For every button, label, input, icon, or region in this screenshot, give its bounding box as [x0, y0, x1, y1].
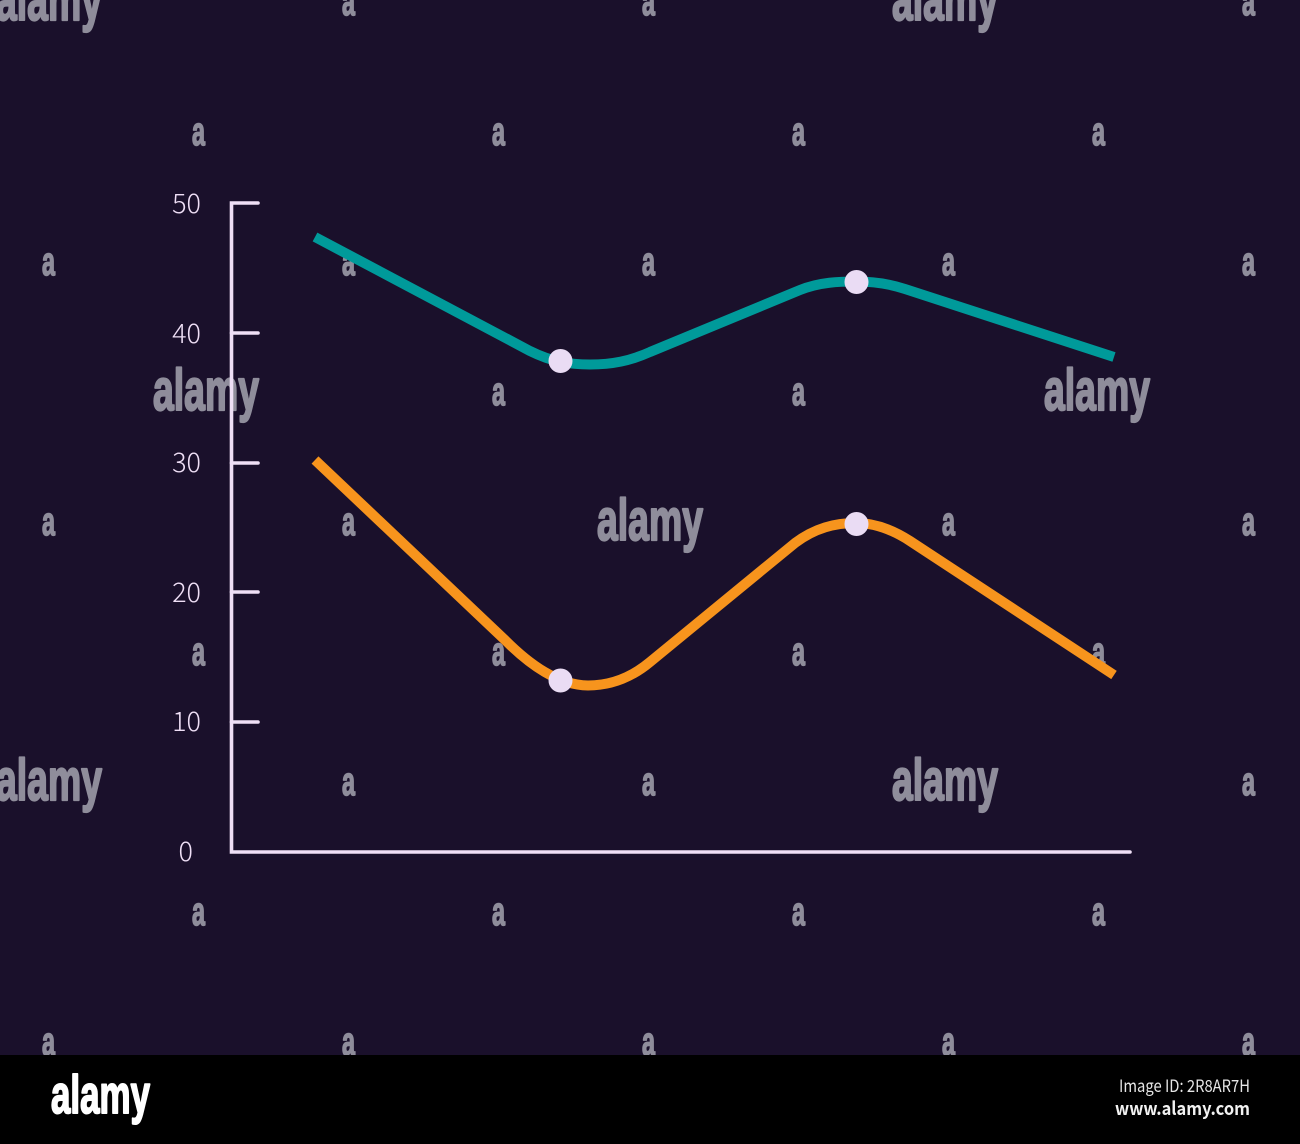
watermark: small repeated marks: a: [792, 370, 805, 414]
y axis labels: 10: [172, 700, 201, 739]
watermark: small repeated marks: a: [1092, 890, 1105, 934]
watermark: small repeated marks: a: [792, 890, 805, 934]
line series: teal: [315, 237, 1114, 364]
footer bar: [0, 1055, 1300, 1144]
watermark: small repeated marks: a: [42, 500, 55, 544]
watermark: small repeated marks: a: [1092, 630, 1105, 674]
watermark: small repeated marks: a: [1242, 1020, 1255, 1064]
watermark: small repeated marks: a: [492, 110, 505, 154]
watermark: small repeated marks: a: [342, 760, 355, 804]
footer logo: alamy: [51, 1065, 150, 1125]
y axis labels: 30: [172, 441, 201, 480]
watermark: small repeated marks: a: [342, 500, 355, 544]
watermark: small repeated marks: a: [492, 890, 505, 934]
y axis labels: 50: [172, 182, 201, 221]
watermark: small repeated marks: a: [642, 240, 655, 284]
watermark: small repeated marks: a: [642, 760, 655, 804]
y axis labels: [172, 182, 201, 869]
watermark: large alamy marks: alamy: [0, 748, 102, 813]
line series: orange: [315, 460, 1114, 686]
watermark: small repeated marks: a: [1242, 240, 1255, 284]
watermark: small repeated marks: a: [192, 110, 205, 154]
watermark: small repeated marks: a: [42, 1020, 55, 1064]
watermark: small repeated marks: a: [492, 630, 505, 674]
watermark: large alamy marks: alamy: [153, 358, 259, 423]
y axis labels: 0: [179, 830, 193, 869]
watermark: large alamy marks: alamy: [892, 748, 998, 813]
watermark: small repeated marks: a: [792, 110, 805, 154]
watermark: small repeated marks: a: [942, 1020, 955, 1064]
watermark: small repeated marks: a: [792, 630, 805, 674]
watermark: small repeated marks: a: [492, 370, 505, 414]
watermark: small repeated marks: a: [1242, 760, 1255, 804]
y axis labels: 40: [172, 312, 201, 351]
watermark: large alamy marks: alamy: [597, 488, 703, 553]
watermark: small repeated marks: a: [1092, 110, 1105, 154]
footer image id: Image ID: 2R8AR7H: [1119, 1072, 1250, 1097]
watermark: small repeated marks: a: [42, 240, 55, 284]
watermark: small repeated marks: a: [192, 890, 205, 934]
watermark: small repeated marks: a: [192, 630, 205, 674]
y axis labels: 20: [172, 571, 201, 610]
watermark: small repeated marks: a: [342, 240, 355, 284]
watermark: small repeated marks: a: [342, 1020, 355, 1064]
watermark: small repeated marks: a: [942, 500, 955, 544]
chart axes: [232, 203, 1130, 852]
watermark: small repeated marks: a: [642, 1020, 655, 1064]
watermark: large alamy marks: alamy: [1044, 358, 1150, 423]
footer website: www.alamy.com: [1115, 1095, 1250, 1121]
watermark: small repeated marks: a: [1242, 500, 1255, 544]
data points: [548, 270, 868, 692]
watermark: large alamy marks: [0, 0, 1150, 813]
watermark: small repeated marks: a: [942, 240, 955, 284]
